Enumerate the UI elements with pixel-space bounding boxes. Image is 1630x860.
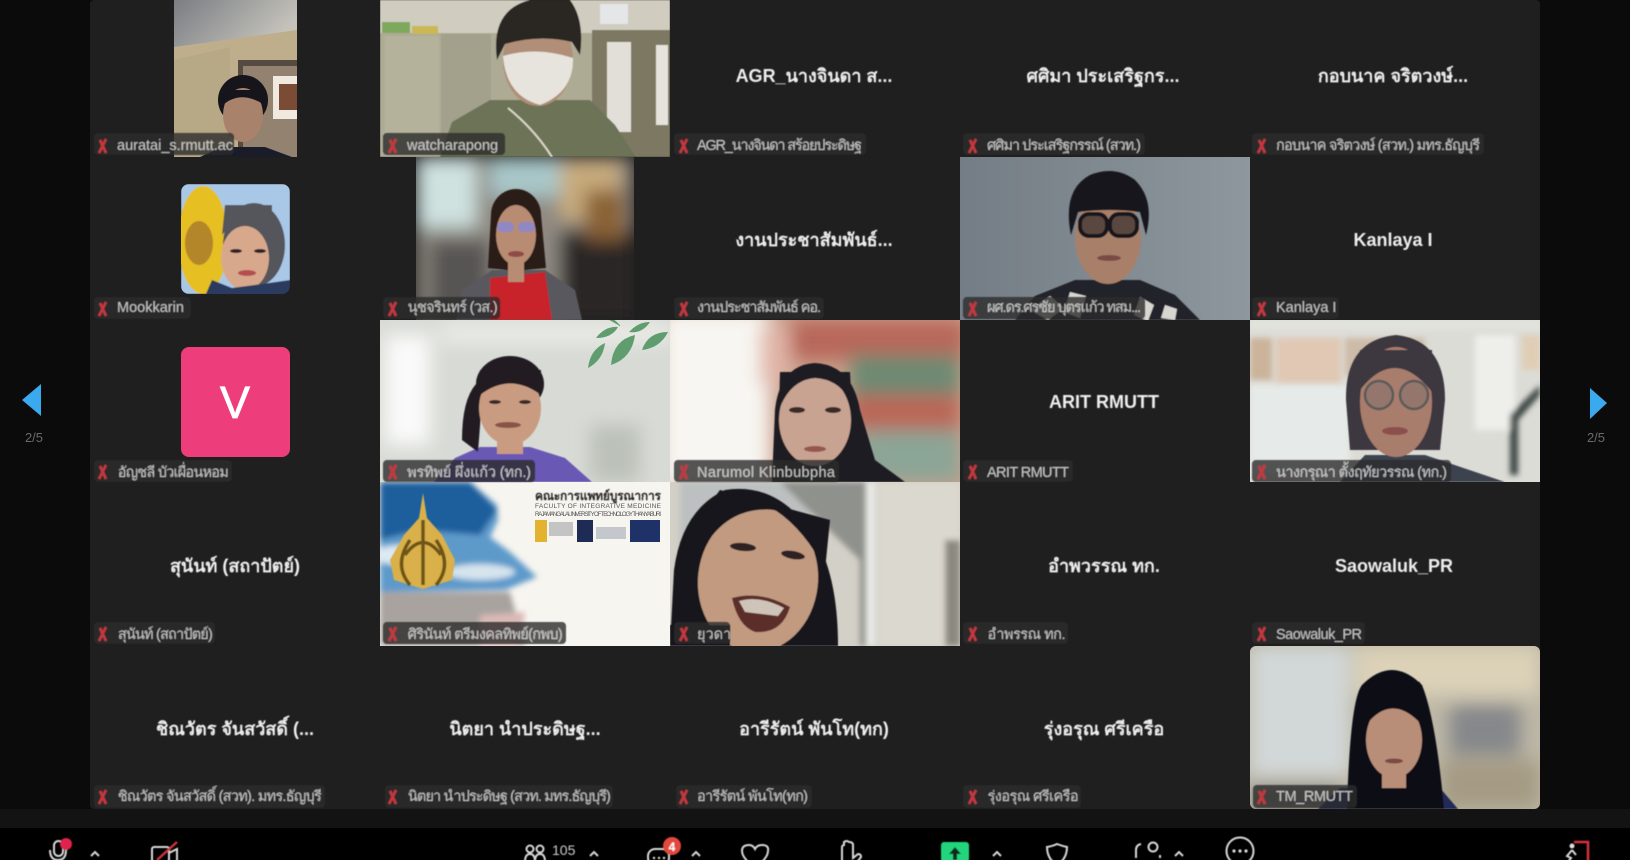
icon: apps [1136,842,1160,858]
label: บุษรินทร์: นุชจรินทร์ (วส.) [408,299,498,316]
name tile: กอบนาค: กอบนาค จริตวงษ์... [1318,65,1468,86]
name tile: ศศิมา: ศศิมา ประเสริฐกร... [1027,66,1179,88]
label: อำพรรณ: อำพรรณ ทก. [987,627,1065,643]
slide tile: faculty logo [374,482,670,646]
label: ยุวดา [674,622,731,644]
label: ชิณวัตร: ชิณวัตร จันสวัสดิ์ (สวท). มทร.ธัญบุรี [118,785,322,805]
label: สุนันท์ [94,622,215,644]
video tile: presenter in red shirt [416,157,634,320]
arrow: next page [1587,388,1607,445]
label: อารีรัตน์ [676,785,812,808]
icon: camera off [152,842,177,860]
icon: participants [525,846,545,860]
icon: security shield [1047,844,1067,860]
slide tile: faculty logo: FACULTY OF INTEGRATIVE MEDICINE [535,503,662,510]
label: อารีรัตน์: อารีรัตน์ พันโท(ทก) [697,787,808,805]
arrow: previous page: 2/5 [25,430,43,445]
video tile: Narumol [670,320,960,482]
label: Mookkarin: Mookkarin [117,300,184,316]
arrow: previous page [22,384,43,445]
caret [692,852,700,856]
label: บุษรินทร์ [383,297,500,319]
label: Narumol [674,460,839,482]
label: กอบนาค [1252,133,1484,155]
label: พรทิพย์ [383,460,535,482]
toolbar icons [50,837,1588,860]
icon: share screen [941,842,969,860]
caret [590,852,598,856]
name tile: Kanlaya I: Kanlaya I [1353,230,1433,250]
icon: chat with badge: 4 [669,840,676,854]
video tile: watcharapong [380,0,670,157]
name tile: AGR: AGR_นางจินดา ส... [736,66,892,86]
name tile: รุ่งอรุณ: รุ่งอรุณ ศรีเครือ [1044,719,1164,741]
video tile: TM_RMUTT [1250,646,1540,810]
icon: leave [1567,842,1588,860]
label: TM_RMUTT [1253,785,1357,808]
avatar: V [181,347,290,457]
avatar: V: V [220,377,250,428]
label: งานประชาสัมพันธ์ [674,297,824,319]
label: อัญชลี: อัญชลี บัวเผื่อนหอม [118,462,229,481]
icon: raise hand [842,841,861,860]
label: กอบนาค: กอบนาค จริตวงษ์ (สวท.) มทร.ธัญบุรี [1276,137,1480,154]
label: Saowaluk: Saowaluk_PR [1276,627,1362,643]
name tile: Saowaluk_PR: Saowaluk_PR [1335,556,1453,576]
label: นิตยา: นิตยา นำประดิษฐ (สวท. มทร.ธัญบุรี) [408,788,611,805]
name labels [94,133,1484,808]
label: ชิณวัตร [94,785,325,808]
name tile: นิตยา: นิตยา นำประดิษฐ... [449,719,601,741]
label: Narumol: Narumol Klinbubpha [697,465,836,481]
label: ศศิมา [963,133,1145,155]
video tile: woman in purple with leaves [380,312,670,482]
label: รุ่งอรุณ [963,785,1081,808]
toolbar background [0,828,1630,860]
video tile: man with glasses [960,157,1250,321]
caret [993,852,1001,856]
avatar photo: Mookkarin [178,184,290,296]
icon: microphone [50,838,72,860]
label: อัญชลี [94,460,232,482]
strip below grid [0,809,1630,828]
label: อำพรรณ [963,622,1068,644]
label: watcharapong [383,133,505,155]
label: ARIT RMUTT [963,460,1073,482]
label: watcharapong: watcharapong [406,138,498,154]
icon: more [1226,838,1254,860]
name tile: ARIT RMUTT: ARIT RMUTT [1049,392,1159,412]
label: นิตยา [385,785,613,808]
name tile: งานประชาสัมพันธ์: งานประชาสัมพันธ์... [735,229,893,250]
name tile: ชิณวัตร: ชิณวัตร จันสวัสดิ์ (... [156,715,314,739]
label: AGR [674,133,866,155]
label: Kanlaya [1252,297,1339,319]
label: รุ่งอรุณ: รุ่งอรุณ ศรีเครือ [988,788,1079,805]
video tile: smiling woman [670,482,960,658]
video tile: woman with round glasses [1250,320,1540,482]
label: นางกรุณา [1252,460,1451,482]
caret [1175,852,1183,856]
video tile: aurati [174,0,298,157]
label: aurati: auratai_s.rmutt.ac [117,138,233,154]
label: ARIT RMUTT: ARIT RMUTT [987,465,1069,481]
name tile: อำพวรรณ: อำพวรรณ ทก. [1048,556,1160,576]
label: ศิรินันท์ [383,622,566,644]
label: Saowaluk [1252,622,1365,644]
participant count: 105 [552,842,576,858]
icon: chat with badge [648,837,681,860]
label: ผศ.ดร.: ผศ.ดร.ศรชัย บุตรแก้ว ทสม... [987,299,1141,316]
label: ศศิมา: ศศิมา ประเสริฐกรรณ์ (สวท.) [987,137,1141,154]
arrow: next page: 2/5 [1587,430,1605,445]
icon: heart [742,845,768,860]
slide tile: faculty logo: RAJAMANGALA UNIVERSITY OF TECHNOLOGY THANYABURI [535,512,661,518]
label: งานประชาสัมพันธ์: งานประชาสัมพันธ์ คอ. [697,299,821,316]
label: ศิรินันท์: ศิรินันท์ ตรีมงคลทิพย์(กพบ) [408,626,563,643]
label: aurati [94,133,234,155]
label: สุนันท์: สุนันท์ (สถาปัตย์) [118,626,213,643]
label: AGR: AGR_นางจินดา สร้อยประดิษฐ [697,137,862,154]
label: Kanlaya: Kanlaya I [1276,300,1336,316]
name tile: สุนันท์: สุนันท์ (สถาปัตย์) [170,555,300,578]
label: TM_RMUTT: TM_RMUTT [1276,789,1353,805]
label: Mookkarin [94,297,191,319]
label: พรทิพย์: พรทิพย์ ผึ่งแก้ว (ทก.) [407,462,531,481]
label: ยุวดา: ยุวดา [697,627,731,643]
slide tile: faculty logo: คณะการแพทย์บูรณาการ [535,489,662,504]
name tile: อารีรัตน์: อารีรัตน์ พันโท(ทก) [739,718,889,739]
caret [91,852,99,856]
label: ผศ.ดร. [963,297,1145,319]
label: นางกรุณา: นางกรุณา ตั้งฤทัยวรรณ (ทก.) [1276,461,1447,481]
